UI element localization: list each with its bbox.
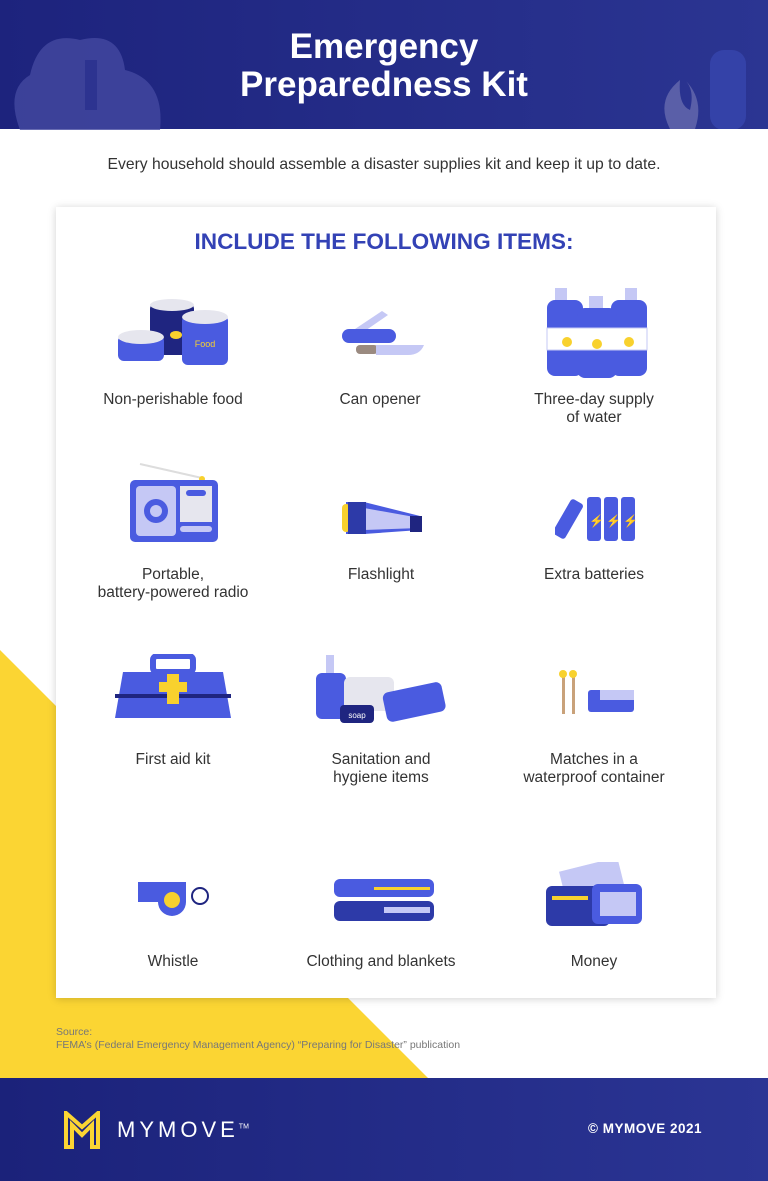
source note [56, 1026, 460, 1051]
label: food: Non-perishable food [103, 391, 243, 408]
icon: first aid kit [115, 654, 231, 718]
icon: batteries: ⚡ [606, 514, 621, 528]
label: sanitation: hygiene items [333, 769, 429, 786]
title: Preparedness Kit [240, 65, 528, 104]
icon: flashlight [342, 502, 422, 534]
source note: FEMA’s (Federal Emergency Management Agency) “Preparing for Disaster” publication [56, 1039, 460, 1051]
icon: money wallet [546, 862, 642, 926]
icon: sanitation: soap [348, 711, 366, 720]
label: water: Three-day supply [534, 391, 654, 408]
title: Emergency [290, 27, 478, 66]
label: batteries: Extra batteries [544, 566, 644, 583]
icon: matches [559, 670, 634, 714]
icon: batteries: ⚡ [589, 514, 604, 528]
label: flashlight: Flashlight [348, 566, 414, 583]
label: first aid: First aid kit [136, 751, 210, 768]
label: money: Money [571, 953, 617, 970]
label: clothing: Clothing and blankets [306, 953, 456, 970]
heading: INCLUDE THE FOLLOWING ITEMS: [194, 229, 574, 254]
label: can opener: Can opener [339, 391, 420, 408]
icon: food cans: Food [195, 339, 215, 349]
icon: radio [130, 463, 218, 542]
icon: can opener [342, 311, 424, 355]
header decorative illustration left [14, 38, 160, 130]
footer [0, 1078, 768, 1181]
label: matches: Matches in a [550, 751, 638, 768]
label: whistle: Whistle [148, 953, 198, 970]
subtitle: Every household should assemble a disaster supplies kit and keep it up to date. [108, 156, 660, 173]
logo [64, 1111, 249, 1149]
header banner [0, 0, 768, 129]
icon: clothing and blankets [334, 879, 434, 921]
icon: water bottles [546, 288, 648, 378]
icon: food cans [118, 299, 228, 365]
icon: sanitation [316, 655, 446, 723]
panel: items card [56, 207, 716, 998]
label: water: of water [566, 409, 622, 426]
header decorative illustration right [664, 50, 746, 129]
label: matches [523, 751, 665, 786]
title [240, 27, 528, 104]
source note: Source: [56, 1026, 92, 1038]
logo: MYMOVETM [117, 1117, 249, 1142]
label: radio: Portable, [142, 566, 204, 583]
label: radio: battery-powered radio [98, 584, 248, 601]
label: water [534, 391, 654, 426]
label: sanitation [331, 751, 431, 786]
copyright: © MYMOVE 2021 [588, 1121, 702, 1136]
label: matches: waterproof container [523, 769, 665, 786]
label: sanitation: Sanitation and [331, 751, 431, 768]
icon: batteries [555, 497, 637, 541]
label: radio [98, 566, 248, 601]
icon: whistle [138, 882, 209, 916]
